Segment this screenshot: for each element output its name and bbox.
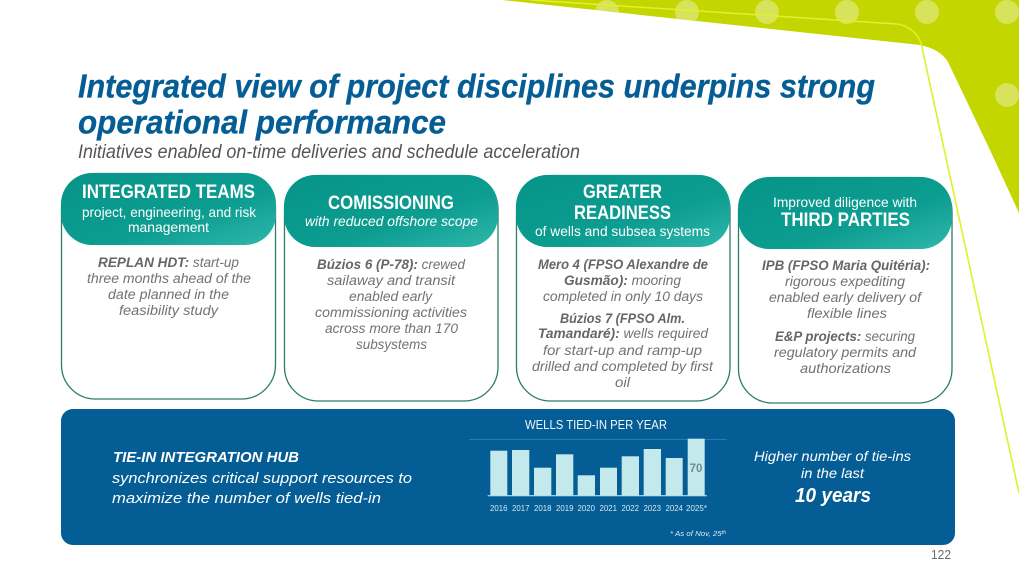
text: IPB and E&P projects <box>762 258 930 376</box>
title: operational performance <box>78 104 446 140</box>
header: greater readiness <box>516 175 730 247</box>
subtitle: Initiatives enabled on-time deliveries and schedule acceleration <box>78 142 580 163</box>
page number: 122 <box>931 548 951 562</box>
header: integrated teams <box>61 173 276 245</box>
text: Buzios 6: sailaway and transit <box>327 273 456 288</box>
text: IPB and E&P projects: IPB (FPSO Maria Quitéria): <box>762 258 930 273</box>
text: REPLAN HDT: feasibility study <box>119 303 219 318</box>
decorative lime corner shape <box>502 0 1019 493</box>
bar chart: wells tied-in per year <box>469 418 727 513</box>
text: Mero 4 and Buzios 7: Gusmão): mooring <box>564 273 681 288</box>
title: Integrated view of project disciplines underpins strong <box>78 68 875 104</box>
panel: tie-in integration hub <box>61 409 955 545</box>
bar chart: wells tied-in per year: 2018 <box>534 503 552 513</box>
header: integrated teams: management <box>128 219 209 235</box>
header: commissioning <box>284 175 498 247</box>
text: Mero 4 and Buzios 7: for start-up and ramp-up <box>543 343 703 358</box>
bar chart: wells tied-in per year: 2024 <box>666 503 683 513</box>
text: Buzios 6: enabled early <box>349 289 433 304</box>
text: Mero 4 and Buzios 7: Tamandaré): wells required <box>538 326 708 341</box>
callout: higher number of tie-ins: in the last <box>801 465 865 481</box>
text: REPLAN HDT: REPLAN HDT: start-up <box>98 255 239 270</box>
bar chart: wells tied-in per year: 2020 <box>578 503 595 513</box>
header: integrated teams: INTEGRATED TEAMS <box>82 182 255 203</box>
text: IPB and E&P projects: enabled early delivery of <box>769 290 922 305</box>
header: commissioning: COMISSIONING <box>328 193 454 214</box>
text: Buzios 6: subsystems <box>356 337 427 352</box>
bar chart: wells tied-in per year: 70 <box>690 463 702 475</box>
text: REPLAN HDT: three months ahead of the <box>87 271 251 286</box>
text: REPLAN HDT: date planned in the <box>108 287 229 302</box>
text: IPB and E&P projects: rigorous expediting <box>785 274 906 289</box>
bar chart: wells tied-in per year: 2016 <box>490 503 508 513</box>
text: Mero 4 and Buzios 7: drilled and completed by first <box>532 359 714 374</box>
bar chart: wells tied-in per year: 2017 <box>512 503 530 513</box>
text: Mero 4 and Buzios 7: oil <box>615 375 631 390</box>
panel: integrated teams <box>61 173 276 399</box>
text: Mero 4 and Buzios 7: completed in only 10 days <box>543 289 703 304</box>
text: Buzios 6: across more than 170 <box>325 321 458 336</box>
text: hub description: TIE-IN INTEGRATION HUB <box>113 450 299 466</box>
header: third parties: THIRD PARTIES <box>781 210 910 231</box>
bar chart: wells tied-in per year: WELLS TIED-IN PER YEAR <box>525 418 667 432</box>
callout: higher number of tie-ins: 10 years <box>795 485 871 507</box>
panel: greater readiness <box>516 175 730 401</box>
text: IPB and E&P projects: regulatory permits and <box>774 345 917 360</box>
bar chart: wells tied-in per year: 2021 <box>600 503 617 513</box>
header: commissioning: with reduced offshore scope <box>305 213 478 229</box>
panel: commissioning <box>284 175 498 401</box>
text: Mero 4 and Buzios 7: Mero 4 (FPSO Alexandre de <box>538 257 708 272</box>
callout: higher number of tie-ins <box>754 448 911 507</box>
footnote: th <box>722 530 726 536</box>
text: hub description: maximize the number of wells tied-in <box>112 491 381 507</box>
text: Buzios 6: Búzios 6 (P-78): crewed <box>317 257 465 272</box>
footnote: * As of Nov, 25 <box>670 529 719 538</box>
text: Buzios 6: commissioning activities <box>315 305 467 320</box>
text: IPB and E&P projects: flexible lines <box>807 306 887 321</box>
text: Mero 4 and Buzios 7 <box>532 257 714 390</box>
text: IPB and E&P projects: authorizations <box>800 361 891 376</box>
callout: higher number of tie-ins: Higher number of tie-ins <box>754 448 911 464</box>
bar chart: wells tied-in per year: 2022 <box>622 503 639 513</box>
text: IPB and E&P projects: E&P projects: securing <box>775 329 915 344</box>
text: hub description: synchronizes critical support resources to <box>112 471 412 487</box>
header: greater readiness: of wells and subsea systems <box>535 223 710 239</box>
header: greater readiness: GREATER <box>583 182 662 203</box>
bar chart: wells tied-in per year: 2023 <box>644 503 661 513</box>
text: Mero 4 and Buzios 7: Búzios 7 (FPSO Alm. <box>560 311 685 326</box>
header: third parties <box>738 177 952 249</box>
header: integrated teams: project, engineering, and risk <box>82 204 257 220</box>
text: REPLAN HDT <box>87 255 251 318</box>
panel: third parties <box>738 177 952 403</box>
header: greater readiness: READINESS <box>574 203 671 224</box>
bar chart: wells tied-in per year: 2019 <box>556 503 574 513</box>
text: hub description <box>112 450 412 507</box>
header: third parties: Improved diligence with <box>773 194 917 210</box>
text: Buzios 6 <box>315 257 467 352</box>
bar chart: wells tied-in per year: 2025* <box>686 503 708 513</box>
title <box>78 68 875 140</box>
